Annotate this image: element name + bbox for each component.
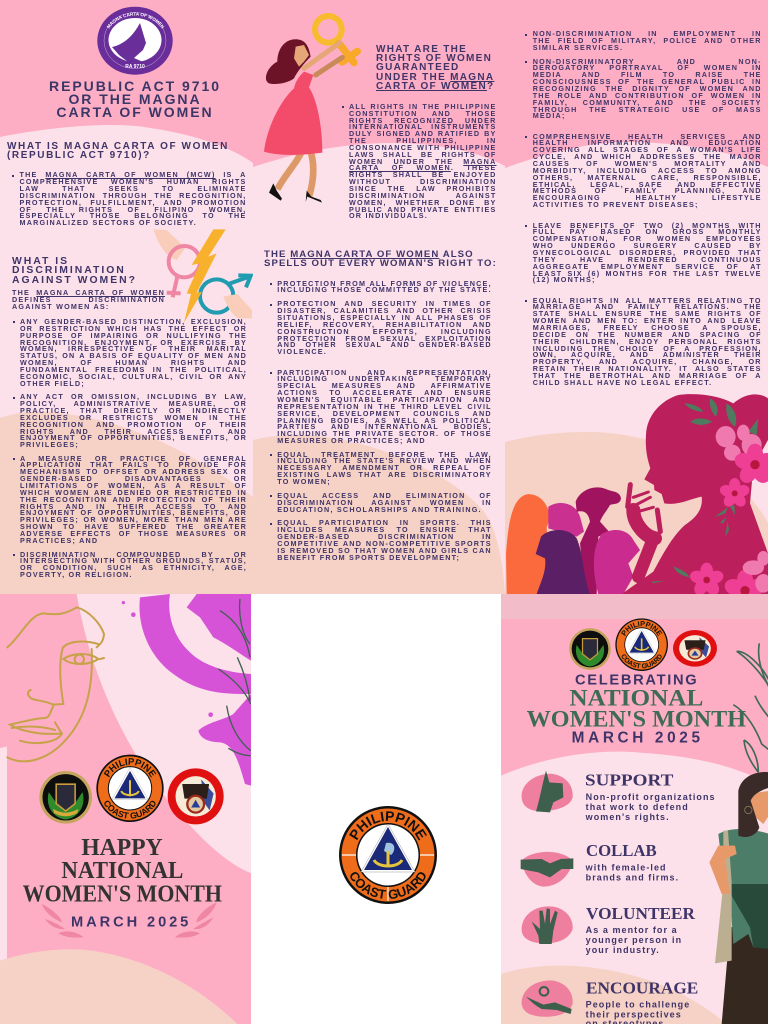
bullet: equal participation in sports: EQUAL PARTICIPATION IN SPORTS. THIS (277, 518, 492, 527)
bullet: measure or practice: A MEASURE OR PRACTICE OF GENERAL (20, 454, 247, 463)
icon: Philippine Coast Guard seal (96, 754, 164, 822)
bullet: disaster protection: VIOLENCE. (277, 347, 327, 356)
bullet: measure or practice (20, 456, 247, 545)
icon: hot pink flower (733, 444, 768, 486)
background waves and silhouettes (505, 142, 768, 594)
bullet: act or omission: EXCLUDES OR RESTRICTS WOMEN IN THE (20, 413, 247, 422)
bullet: measure or practice: SHOWN TO HAVE SUFFERED THE GREATER (20, 522, 247, 531)
bullet: measure or practice: THE RECOGNITION AND PROTECTION OF THEIR (20, 495, 247, 504)
bullet: marriage and family: STATE SHALL ENSURE THE SAME RIGHTS OF (533, 309, 762, 318)
bullet: marriage and family: MARRIAGE AND FAMILY RELATIONS. THE (533, 302, 762, 311)
text: definition of the Magna Carta: OF THE RIGHTS OF FILIPINO WOMEN, (20, 205, 246, 214)
bullet: leave benefits: AGGREGATE EMPLOYMENT SERVICE OF AT (533, 262, 762, 271)
panel: what is the Magna Carta of Women (0, 0, 253, 594)
bullet: health services: ACTIVITIES TO PREVENT DISEASES; (533, 200, 699, 209)
bullet: media portrayal: DEROGATORY PORTRAYAL OF WOMEN IN (533, 63, 762, 72)
text: definition of the Magna Carta: THE MAGNA CARTA OF WOMEN (MCW) IS A (20, 170, 246, 179)
bullet: employment: SIMILAR SERVICES. (533, 43, 623, 52)
activity: support: SUPPORT (585, 770, 673, 789)
bullet: marriage and family: THAT THE BETROTHAL AND MARRIAGE OF A (533, 371, 762, 380)
bullet: media portrayal: CONSCIOUSNESS OF THE GENERAL PUBLIC IN (533, 77, 762, 86)
icon: right seal (168, 768, 224, 824)
text: all rights: CARTA OF WOMEN. THESE (349, 163, 496, 172)
bullet: participation: ACTIONS TO ACCELERATE AND ENSURE (277, 388, 492, 397)
bullet: leave benefits (533, 223, 762, 284)
text: all rights: INTERNATIONAL INSTRUMENTS (349, 122, 496, 131)
bullet: health services: COMPREHENSIVE HEALTH SERVICES AND (533, 132, 762, 141)
text: definition of the Magna Carta (20, 172, 246, 227)
activity: encourage: their perspectives (586, 1010, 682, 1020)
heading: happy national women's month: NATIONAL (61, 857, 183, 884)
activity: collab: COLLAB (586, 841, 657, 860)
bullet: act or omission (20, 394, 247, 449)
bullet: leave benefits: WHO UNDERGO SURGERY CAUSED BY (533, 241, 762, 250)
title (49, 78, 221, 120)
bullet: gender-based distinction: STATUS, ON A BASIS OF EQUALITY OF MEN AND (20, 351, 247, 360)
icon: right seal (673, 630, 717, 667)
bullet: disaster protection: SITUATIONS, ESPECIALLY IN ALL PHASES OF (277, 313, 492, 322)
bullet: act or omission: POLICY, ADMINISTRATIVE MEASURE, OR (20, 399, 247, 408)
activity: encourage: ENCOURAGE (586, 979, 698, 998)
bullet: equal participation in sports: INCLUDES MEASURES TO ENSURE THAT (277, 525, 492, 534)
text: definition of the Magna Carta: PROTECTION, FULFILLMENT, AND PROMOTION (20, 198, 246, 207)
bullet: participation: SPECIAL MEASURES AND AFFIRMATIVE (277, 381, 492, 390)
text: discrimination intro: AGAINST WOMEN AS: (12, 302, 110, 311)
bullet: media portrayal: THE ROLE AND CONTRIBUTION OF WOMEN IN (533, 91, 762, 100)
bullet: marriage and family: OWN, ACQUIRE, AND ADMINISTER THEIR (533, 350, 762, 359)
heading: national women's month: NATIONAL (569, 685, 703, 711)
panel: further rights and silhouettes (505, 0, 768, 594)
text: all rights: RIGHTS RECOGNIZED UNDER (349, 116, 496, 125)
bullet: participation: INCLUDING THE PRIVATE SECTOR. OF THOSE (277, 429, 492, 438)
icon: Philippine Coast Guard seal: PHILIPPINE (104, 758, 156, 778)
bullet: participation: REPRESENTATION IN THE THIRD LEVEL CIVIL (277, 402, 492, 411)
activity: collab: brands and firms. (586, 872, 679, 882)
bullet: disaster protection: PROTECTION FROM SEXUAL EXPLOITATION (277, 334, 492, 343)
bullet: leave benefits: FULL PAY BASED ON GROSS MONTHLY (533, 227, 762, 236)
title: OR THE MAGNA (68, 91, 202, 107)
bullet: media portrayal: THROUGH THE STRATEGIC USE OF MASS (533, 104, 762, 114)
bullet: gender-based distinction: FUNDAMENTAL FREEDOMS IN THE POLITICAL, (20, 365, 247, 374)
bullet: disaster protection: CONSTRUCTION EFFORTS, INCLUDING (277, 327, 492, 336)
illustration: silhouettes of women with flowers (506, 394, 768, 612)
activity: volunteer: VOLUNTEER (586, 904, 696, 923)
activity: volunteer: younger person in (586, 935, 682, 945)
text: discrimination intro (12, 288, 165, 311)
text: definition of the Magna Carta: ESPECIALLY THOSE BELONGING TO THE (20, 211, 246, 220)
heading: happy national women's month: HAPPY (81, 834, 163, 861)
bullet: participation: MEASURES OR PRACTICES; AND (277, 436, 426, 445)
bullet: disaster protection (277, 301, 492, 356)
heading: also spells out: THE MAGNA CARTA OF WOMEN ALSO (264, 249, 474, 260)
bullet: measure or practice: ENJOYMENT OF OPPORTUNITIES, BENEFITS, OR (20, 508, 247, 517)
bullet: gender-based distinction: OR RESTRICTION WHICH HAS THE EFFECT OR (20, 324, 247, 333)
bullet: health services (533, 134, 762, 209)
bullet: leave benefits: LEAST SIX (6) MONTHS FOR THE LAST TWELVE (533, 268, 762, 278)
bullet: media portrayal: MEDIA AND FILM TO RAISE THE (533, 70, 762, 79)
activity: encourage (522, 979, 698, 1024)
bullet: equal treatment: INCLUDING THE STATE'S REVIEW AND WHEN (277, 456, 492, 465)
heading: rights of women guaranteed: CARTA OF WOMEN? (376, 81, 494, 92)
bullet: participation: PARTIES AND INTERNATIONAL BODIES, (277, 422, 492, 431)
bullet: gender-based distinction: OTHER FIELD; (20, 379, 85, 388)
bullet: marriage and family: MARRIAGES, FREELY CHOOSE A SPOUSE, (533, 323, 762, 332)
bullet: protection from violence: PROTECTION FROM ALL FORMS OF VIOLENCE, (277, 279, 492, 288)
text: all rights: PUBLIC AND PRIVATE ENTITIES (349, 205, 496, 214)
activity: collab (521, 841, 679, 887)
heading: happy national women's month: WOMEN'S MONTH (23, 880, 222, 907)
heading: rights of women guaranteed: GUARANTEED (376, 62, 460, 73)
text: celebrating: CELEBRATING (575, 673, 697, 689)
bullet: marriage and family: DECIDE ON THE NUMBER AND SPACING OF (533, 330, 762, 339)
bullet: compounded discrimination: OR CONDITION, SUCH AS ETHNICITY, AGE, (20, 563, 247, 572)
text: all rights: THE PHILIPPINES, IN (349, 136, 496, 145)
bullet: measure or practice: GENDER-BASED DISADVANTAGES OR (20, 474, 247, 483)
bullet: gender-based distinction: WOMEN, OF HUMAN RIGHTS AND (20, 358, 247, 367)
bullet: measure or practice: MECHANISMS TO OFFSET OR ADDRESS SEX OR (20, 467, 247, 476)
bullet: health services: CAUSES OF WOMEN'S MORTALITY AND (533, 159, 762, 168)
panel: happy national women's month (0, 594, 251, 1024)
bullet: marriage and family: PROPERTY, AND ACQUIRE, CHANGE, OR (533, 357, 762, 366)
bullet: media portrayal: RECOGNIZING THE DIGNITY OF WOMEN AND (533, 84, 762, 93)
bullet: gender-based distinction (20, 319, 247, 387)
text: all rights (349, 104, 496, 220)
bullet: equal participation in sports (277, 520, 492, 561)
panel: celebrating national women's month (501, 594, 768, 1024)
bullet: media portrayal: MEDIA; (533, 111, 566, 120)
heading: rights of women guaranteed: UNDER THE MAGNA (376, 72, 494, 83)
bullet: marriage and family: CHILD SHALL HAVE NO LEGAL EFFECT. (533, 378, 712, 387)
heading: rights of women guaranteed (376, 44, 494, 92)
icon: raised hand (628, 485, 660, 577)
bullet: gender-based distinction: WOMEN, IRRESPECTIVE OF THEIR MARITAL (20, 344, 247, 353)
bullet: leave benefits: GYNECOLOGICAL DISORDERS, PROVIDED THAT (533, 248, 762, 257)
poster artwork and activities (501, 594, 768, 1024)
bullet: equal treatment: NECESSARY AMENDMENT OR REPEAL OF (277, 463, 492, 472)
bullet: measure or practice: PRIVILEGES; OR WOMEN, MORE THAN MEN ARE (20, 515, 247, 524)
text: definition of the Magna Carta: MARGINALIZED SECTORS OF SOCIETY. (20, 218, 197, 227)
icon: Magna Carta of Women seal: MAGNA CARTA OF WOMEN (106, 12, 164, 28)
bullet: measure or practice: RIGHTS AND IN THEIR ACCESS TO AND (20, 502, 247, 510)
logo: Philippine Coast Guard: COAST GUARD (350, 872, 426, 899)
heading: what is discrimination: AGAINST WOMEN? (12, 275, 137, 286)
text: all rights: OR INDIVIDUALS. (349, 211, 428, 220)
icon: Philippine Coast Guard seal (615, 618, 668, 671)
bullet: marriage and family: INCLUDING THE CHOICE OF A PROFESSION, (533, 344, 762, 352)
bullet: employment (533, 31, 762, 52)
heading: national women's month (527, 685, 746, 733)
text: all rights: RIGHTS SHALL BE ENJOYED (349, 170, 496, 179)
icon: corner flower (723, 570, 767, 612)
activity: collab: with female-led (585, 862, 667, 872)
bullet: act or omission: RIGHTS AND THEIR ACCESS TO AND (20, 427, 247, 436)
bullet: protection from violence (277, 281, 492, 294)
text: all rights: WOMEN, WHETHER DONE BY (349, 198, 496, 207)
bullet: participation: SERVICE, DEVELOPMENT COUNCILS AND (277, 409, 492, 418)
text: all rights: LAWS SHALL BE RIGHTS OF (349, 150, 496, 159)
bullet: compounded discrimination: INTERSECTING WITH OTHER GROUNDS, STATUS, (20, 556, 247, 565)
heading: what is discrimination (12, 256, 137, 286)
text: all rights: SINCE THE LAW PROHIBITS (349, 184, 496, 193)
bullet: marriage and family: RETAIN THEIR NATIONALITY. IT ALSO STATES (533, 364, 762, 373)
icon: corner pale flower (743, 551, 768, 593)
text: all rights: DULY SIGNED AND RATIFIED BY (349, 129, 496, 138)
bullet: participation: INCLUDING UNDERTAKING TEMPORARY (277, 374, 492, 383)
bullet: health services: OTHERS, MATERNAL CARE, RESPONSIBLE, (533, 173, 762, 182)
text: all rights: CONSTITUTION AND THOSE (349, 109, 496, 118)
bullet: leave benefits: COMPENSATION, FOR WOMEN EMPLOYEES (533, 234, 762, 243)
text: definition of the Magna Carta: DISCRIMINATION THROUGH THE RECOGNITION, (20, 191, 246, 200)
illustration: woman holding female symbol (264, 16, 357, 203)
heading: what is Magna Carta (7, 140, 229, 161)
bullet: participation: PARTICIPATION AND REPRESENTATION, (277, 368, 492, 377)
logo: Philippine Coast Guard (339, 806, 437, 904)
bullet: measure or practice: PRACTICES; AND (20, 536, 98, 545)
logo: Philippine Coast Guard: PHILIPPINE (349, 811, 427, 840)
icon: small flower (718, 478, 751, 509)
text: all rights: DISCRIMINATION AGAINST (349, 191, 496, 200)
bullet: participation: PLANNING BODIES, AS WELL AS POLITICAL (277, 416, 492, 424)
bullet: gender-based distinction: RECOGNITION, ENJOYMENT, OR EXERCISE BY (20, 338, 247, 347)
text: all rights: ALL RIGHTS IN THE PHILIPPINE (349, 102, 496, 111)
icon: Philippine Coast Guard seal: COAST GUARD (104, 800, 156, 819)
bullet: measure or practice: LIMITATIONS OF WOMEN, AS A RESULT OF (20, 481, 247, 490)
text: all rights: CONSONANCE WITH PHILIPPINE (349, 143, 496, 152)
bullet: health services: HEALTH INFORMATION AND EDUCATION (533, 138, 762, 147)
bullet: health services: CYCLE, AND WHICH ADDRESSES THE MAJOR (533, 152, 762, 161)
bullet: health services: MORBIDITY, INCLUDING ACCESS TO AMONG (533, 166, 762, 175)
heading: rights of women guaranteed: WHAT ARE THE (376, 44, 467, 55)
activity: volunteer: As a mentor for a (586, 925, 678, 935)
illustration: magenta paint strokes (139, 594, 251, 786)
bullet: act or omission: PRIVILEGES; (20, 440, 79, 449)
icon: left seal (39, 771, 92, 824)
bullet: measure or practice: ADVERSE EFFECTS OF THOSE MEASURES OR (20, 529, 247, 538)
bullet: equal access: EQUAL ACCESS AND ELIMINATION OF (277, 491, 492, 500)
bullet: media portrayal (533, 59, 762, 120)
bullet: disaster protection: PROTECTION AND SECURITY IN TIMES OF (277, 299, 492, 308)
text: all rights: WITHOUT DISCRIMINATION (349, 177, 496, 186)
activity: support (522, 770, 716, 822)
bullet: equal access: DISCRIMINATION AGAINST WOMEN IN (277, 498, 492, 507)
bullet: protection from violence: INCLUDING THOSE COMMITTED BY THE STATE. (277, 285, 492, 294)
activity: volunteer (522, 904, 696, 955)
illustration: green leaf outlines (218, 599, 251, 756)
icon: left seal (569, 628, 611, 670)
icon: Philippine Coast Guard seal: PHILIPPINE (621, 621, 662, 636)
icon: Magna Carta of Women seal (97, 6, 173, 75)
decorative laurels (42, 902, 217, 938)
bullet: equal participation in sports: IS REMOVED SO THAT WOMEN AND GIRLS CAN (277, 546, 492, 555)
heading: also spells out: SPELLS OUT EVERY WOMAN'S RIGHT TO: (264, 258, 497, 269)
bullet: measure or practice: WHICH WOMEN ARE DENIED OR RESTRICTED IN (20, 488, 247, 497)
bullet: disaster protection: RELIEF, RECOVERY, REHABILITATION AND (277, 320, 492, 329)
bullet: act or omission: ANY ACT OR OMISSION, INCLUDING BY LAW, (20, 392, 247, 401)
bullet: equal participation in sports: GENDER-BASED DISCRIMINATION IN (277, 532, 492, 541)
bullet: gender-based distinction: PURPOSE OF IMPAIRING OR NULLIFYING THE (20, 331, 247, 340)
activity: support: that work to defend (586, 802, 689, 812)
activity: encourage: People to challenge (586, 1000, 690, 1010)
illustration: green leaf outlines (733, 643, 768, 772)
bullet: equal treatment: TO WOMEN; (277, 477, 331, 486)
heading: what is Magna Carta: WHAT IS MAGNA CARTA OF WOMEN (7, 140, 229, 152)
bullet: act or omission: PRACTICE, THAT DIRECTLY OR INDIRECTLY (20, 406, 247, 415)
bullet: participation (277, 370, 492, 445)
bullet: leave benefits: LEAVE BENEFITS OF TWO (2) MONTHS WITH (533, 221, 762, 230)
bullet: equal treatment (277, 452, 492, 486)
bullet: leave benefits: THEY HAVE RENDERED CONTINUOUS (533, 255, 762, 264)
bullet: measure or practice: APPLICATION THAT FAILS TO PROVIDE FOR (20, 460, 247, 469)
bullet: health services: ENCOURAGING HEALTHY LIFESTYLE (533, 193, 762, 202)
text: definition of the Magna Carta: COMPREHENSIVE WOMEN'S HUMAN RIGHTS (20, 177, 246, 186)
heading: national women's month: WOMEN'S MONTH (527, 707, 746, 733)
activity: volunteer: your industry. (586, 945, 660, 955)
icon: Magna Carta of Women seal: RA 9710 (125, 64, 145, 70)
bullet: equal treatment: EQUAL TREATMENT BEFORE THE LAW, (277, 450, 492, 459)
illustration: gold line-art face (7, 607, 104, 761)
bullet: equal access: EDUCATION, SCHOLARSHIPS AND TRAINING. (277, 505, 482, 514)
bullet: marriage and family: THEIR CHILDREN, ENJOY PERSONAL RIGHTS (533, 337, 762, 346)
bullet: marriage and family (533, 298, 762, 387)
bullet: compounded discrimination: DISCRIMINATION COMPOUNDED BY OR (20, 550, 247, 559)
bullet: leave benefits: (12) MONTHS; (533, 275, 596, 284)
bullet: disaster protection: DISASTER, CALAMITIES AND OTHER CRISIS (277, 306, 492, 315)
icon: Philippine Coast Guard seal: COAST GUARD (622, 654, 662, 668)
bullet: compounded discrimination (20, 552, 247, 579)
title: REPUBLIC ACT 9710 (49, 78, 221, 94)
bullet: marriage and family: WOMEN AND MEN TO: ENTER INTO AND LEAVE (533, 316, 762, 325)
poster artwork (0, 594, 251, 1024)
background waves and gender icons (0, 6, 253, 594)
icon: lower flower (688, 563, 725, 598)
heading: happy national women's month (23, 834, 222, 907)
heading: what is Magna Carta: (REPUBLIC ACT 9710)? (7, 150, 151, 161)
text: march 2025: MARCH 2025 (572, 729, 700, 746)
bullet: employment: THE FIELD OF MILITARY, POLICE AND OTHER (533, 36, 762, 45)
illustration: woman with bag (709, 772, 768, 1024)
bullet: health services: COVERING ALL STAGES OF A WOMAN'S LIFE (533, 145, 762, 154)
bullet: health services: METHODS OF FAMILY PLANNING, AND (533, 186, 762, 195)
heading: what is discrimination: DISCRIMINATION (12, 265, 126, 276)
icon: pale flower (716, 425, 762, 461)
activity: support: women's rights. (585, 812, 670, 822)
title: CARTA OF WOMEN (56, 104, 214, 120)
bullet: disaster protection: AND OTHER SEXUAL AND GENDER-BASED (277, 340, 492, 349)
text: discrimination intro: THE MAGNA CARTA OF WOMEN (12, 288, 165, 297)
bullet: compounded discrimination: POVERTY, OR RELIGION. (20, 570, 133, 579)
bullet: equal participation in sports: BENEFIT FROM SPORTS DEVELOPMENT; (277, 553, 460, 562)
bullet: gender-based distinction: ANY GENDER-BASED DISTINCTION, EXCLUSION, (20, 317, 247, 326)
bullet: equal participation in sports: COMPETITIVE AND NON-COMPETITIVE SPORTS (277, 539, 492, 548)
background waves and woman illustration (253, 13, 505, 594)
bullet: health services: ETHICAL, LEGAL, SAFE AND EFFECTIVE (533, 180, 762, 188)
bullet: act or omission: RECOGNITION AND PROMOTION OF THEIR (20, 420, 247, 429)
text: definition of the Magna Carta: LAW THAT SEEKS TO ELIMINATE (20, 184, 246, 193)
bullet: media portrayal: FAMILY, COMMUNITY, AND THE SOCIETY (533, 98, 762, 107)
panel: rights of women (253, 0, 505, 594)
heading: rights of women guaranteed: RIGHTS OF WOMEN (376, 53, 492, 64)
activity: support: Non-profit organizations (586, 792, 716, 802)
text: all rights: WOMEN UNDER THE MAGNA (349, 157, 496, 166)
text: march 2025: MARCH 2025 (71, 915, 188, 931)
heading: what is discrimination: WHAT IS (12, 256, 69, 267)
heading: also spells out (264, 249, 497, 269)
bullet: employment: NON-DISCRIMINATION IN EMPLOYMENT IN (533, 29, 762, 38)
bullet: participation: WOMEN'S EQUITABLE PARTICIPATION AND (277, 395, 492, 404)
text: discrimination intro: DEFINES DISCRIMINATION (12, 295, 165, 304)
bullet: equal treatment: EXISTING LAWS THAT ARE DISCRIMINATORY (277, 470, 492, 479)
bullet: equal access (277, 493, 492, 513)
bullet: media portrayal: NON-DISCRIMINATORY AND NON- (533, 57, 762, 66)
bullet: gender-based distinction: ECONOMIC, SOCIAL, CULTURAL, CIVIL OR ANY (20, 372, 247, 381)
bullet: act or omission: ENJOYMENT OF OPPORTUNITIES, BENEFITS, OR (20, 433, 247, 442)
bullet: marriage and family: EQUAL RIGHTS IN ALL MATTERS RELATING TO (533, 296, 762, 305)
icon: gender symbols with lightning bolt (153, 229, 252, 323)
